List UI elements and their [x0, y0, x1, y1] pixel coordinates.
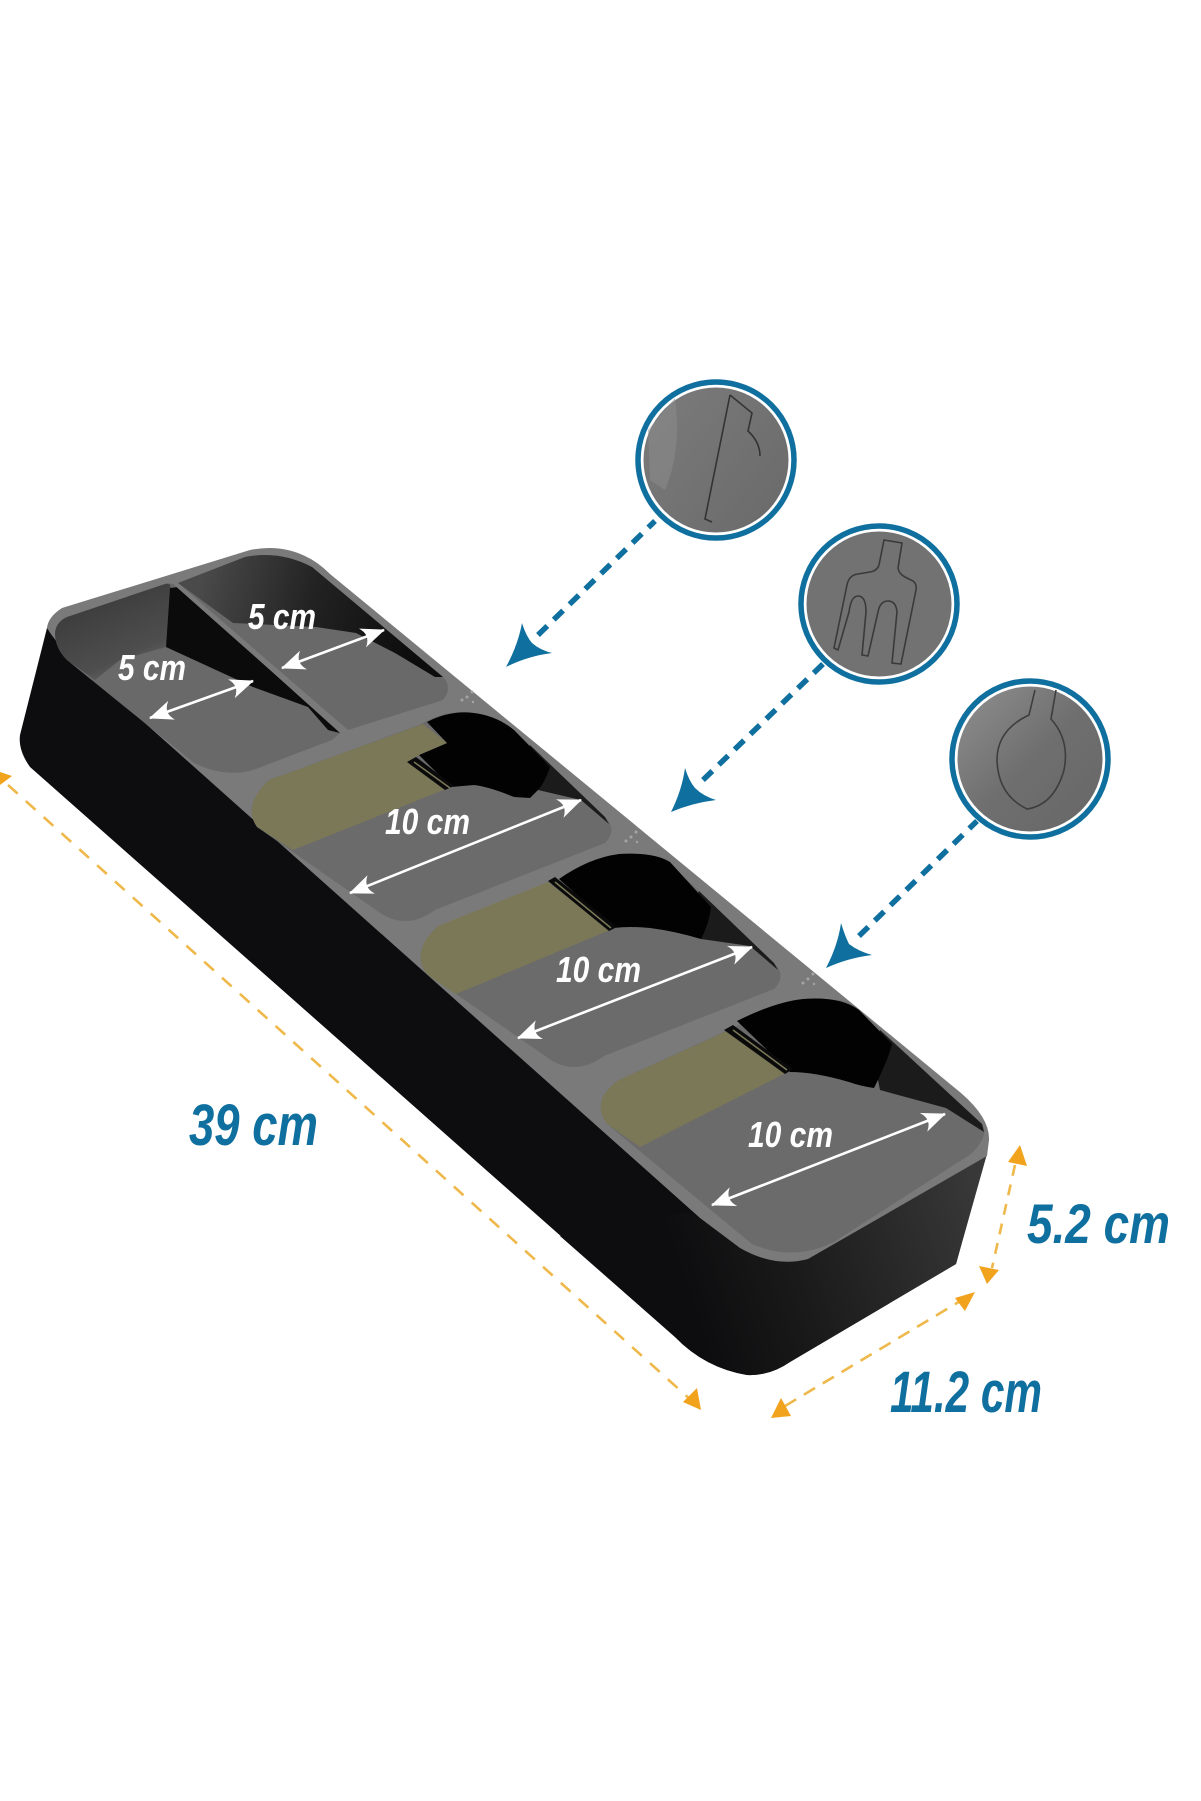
- spoon icon: [997, 690, 1065, 809]
- cut-out hole: [419, 712, 550, 798]
- dashed pointer: [859, 821, 977, 936]
- badge ring: [952, 681, 1108, 837]
- label: 10 cm second: 10 cm: [556, 949, 641, 990]
- back wall shadow: [874, 1030, 984, 1132]
- label: 5 cm left: 5 cm: [118, 647, 186, 688]
- dimension: height 5.2 cm: [979, 1145, 1170, 1284]
- slot highlight: [414, 762, 450, 788]
- floor: [601, 999, 984, 1253]
- floor: [252, 712, 612, 921]
- fork icon: [834, 540, 916, 664]
- olive surface: [601, 1031, 788, 1147]
- badge disc: [958, 686, 1102, 832]
- label: 5.2 cm: [1027, 1192, 1170, 1255]
- arrowhead: [671, 768, 716, 812]
- knife icon: [705, 395, 760, 522]
- white arrow: 10 cm first: [350, 800, 581, 893]
- back wall shadow: [520, 745, 609, 824]
- dimension: length 39 cm: [0, 772, 701, 1410]
- slot: [407, 757, 454, 790]
- compartment: 10 cm second: [421, 854, 780, 1067]
- slot: [548, 877, 617, 931]
- olive surface: [421, 882, 610, 994]
- badge ring: [638, 382, 794, 538]
- arrowhead: [826, 923, 872, 968]
- arrowhead end: [683, 1388, 701, 1410]
- callout: spoon recess: [826, 681, 1108, 968]
- label: 11.2 cm: [890, 1360, 1042, 1425]
- callout: knife recess: [506, 382, 794, 667]
- divider between 5 cm compartments: [175, 583, 344, 733]
- label: 5 cm right: 5 cm: [248, 596, 316, 637]
- arrowhead start: [0, 772, 12, 785]
- rim specks: [460, 690, 815, 985]
- floor: [178, 555, 448, 730]
- floor and walls: [55, 583, 340, 773]
- dashed line: [992, 1165, 1015, 1268]
- white arrow: 5 cm left: [150, 681, 253, 718]
- white arrow: 10 cm third: [712, 1114, 945, 1205]
- dimension: width 11.2 cm: [771, 1292, 1042, 1425]
- tray body: [20, 548, 989, 1375]
- tray top rim: [47, 548, 989, 1262]
- badge ring: [801, 526, 957, 682]
- white arrow: 10 cm second: [518, 947, 752, 1038]
- wall highlight: [648, 398, 677, 490]
- dashed line: [8, 785, 692, 1401]
- white arrow: 5 cm right: [282, 630, 384, 668]
- olive surface: [252, 724, 451, 850]
- arrowhead left: [771, 1398, 791, 1418]
- tray end face: [560, 1154, 987, 1375]
- arrowhead bottom: [979, 1266, 999, 1284]
- arrowhead right: [955, 1292, 975, 1311]
- label: 10 cm first: 10 cm: [385, 801, 470, 842]
- dashed line: [785, 1300, 962, 1406]
- dashed pointer: [538, 521, 655, 635]
- badge disc: [806, 532, 952, 676]
- arrowhead: [506, 623, 552, 667]
- arrowhead top: [1008, 1145, 1027, 1166]
- slot highlight: [555, 882, 611, 928]
- label: 39 cm: [189, 1093, 318, 1158]
- compartment: 5 cm right: [178, 555, 448, 730]
- slot: [724, 1025, 793, 1074]
- callout: fork recess: [671, 526, 957, 812]
- tray side wall: [20, 555, 987, 1375]
- back wall shadow: [689, 891, 778, 970]
- compartment: 10 cm third: [601, 998, 984, 1253]
- badge disc: [644, 388, 788, 532]
- compartment: 10 cm first: [252, 712, 612, 921]
- slot highlight: [733, 1030, 787, 1070]
- upper wall shadow: [178, 555, 443, 677]
- compartment: 5 cm left: [55, 583, 340, 773]
- cut-out hole: [737, 998, 892, 1088]
- floor: [421, 858, 780, 1067]
- cut-out hole: [559, 854, 711, 939]
- label: 10 cm third: 10 cm: [748, 1114, 833, 1155]
- dashed pointer: [703, 664, 823, 780]
- divider shadow: [166, 587, 340, 733]
